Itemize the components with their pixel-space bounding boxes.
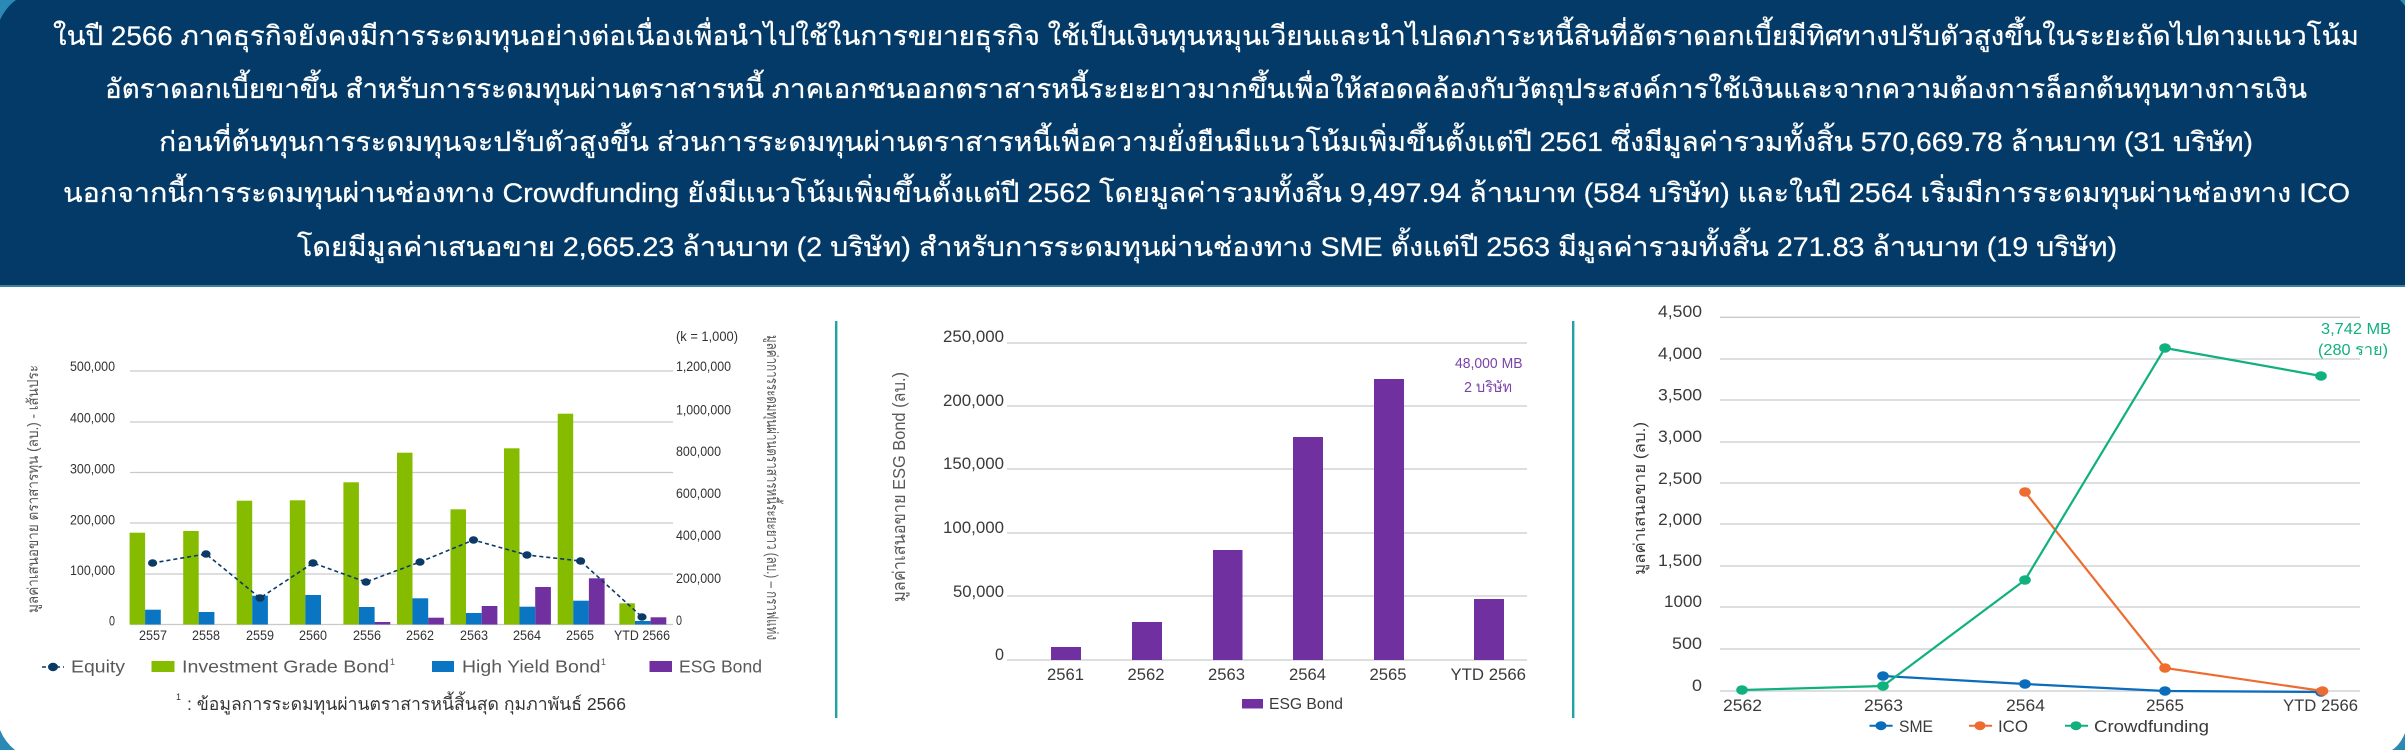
y axis title: มูลค่าเสนอขาย ESG Bond (ลบ.) (889, 372, 910, 602)
category labels: 2564 (513, 627, 541, 643)
left axis labels: 400,000 (70, 410, 115, 426)
right axis labels: 200,000 (676, 570, 721, 586)
category labels: 2563 (1208, 665, 1245, 684)
right axis labels: 600,000 (676, 485, 721, 501)
header panel (0, 0, 2405, 287)
right axis labels: 1,000,000 (676, 402, 731, 418)
ICO line (2019, 487, 2328, 696)
category labels: 2560 (299, 627, 327, 643)
summary text: โดยมีมูลค่าเสนอขาย 2,665.23 ล้านบาท (2 บริษัท) สำหรับการระดมทุนผ่านช่องทาง SME ตั้งแต่ปี 2563 มีมูลค่ารวมทั้งสิ้น 271.83 ล้านบาท (19 บริษัท) (297, 227, 2117, 264)
y axis labels: 3,000 (1658, 427, 1702, 446)
category labels (1047, 665, 1526, 684)
y axis labels: 4,500 (1658, 302, 1702, 321)
legend: 1 (601, 657, 606, 667)
legend: Crowdfunding (2094, 717, 2209, 736)
y axis labels: 500 (1672, 634, 1702, 653)
legend: ESG Bond (679, 656, 762, 676)
y axis labels: 2,000 (1658, 510, 1702, 529)
left axis labels: 0 (109, 613, 115, 629)
category labels (1723, 696, 2358, 715)
y axis title: มูลค่าเสนอขาย (ลบ.) (1632, 422, 1650, 575)
category labels: 2558 (192, 627, 220, 643)
category labels: 2562 (406, 627, 434, 643)
y axis labels: 200,000 (943, 391, 1004, 410)
y axis labels: 2,500 (1658, 469, 1702, 488)
y axis labels: 150,000 (943, 454, 1004, 473)
summary text: อัตราดอกเบี้ยขาขึ้น สำหรับการระดมทุนผ่านตราสารหนี้ ภาคเอกชนออกตราสารหนี้ระยะยาวมากขึ้นเพื่อให้สอดคล้องกับวัตถุประสงค์การใช้เงินและจากความต้องการล็อกต้นทุนทางการเงิน (105, 69, 2307, 106)
y axis labels: 1,500 (1658, 551, 1702, 570)
ESG bars (1051, 379, 1504, 660)
ESG bars (375, 578, 666, 624)
y axis labels: 50,000 (953, 582, 1004, 601)
y axis labels: 3,500 (1658, 386, 1702, 405)
left axis labels (70, 358, 115, 629)
category labels: 2559 (246, 627, 274, 643)
callout: crowdfunding value: (280 ราย) (2318, 342, 2388, 359)
left axis labels: 200,000 (70, 512, 115, 528)
category labels: 2562 (1723, 696, 1762, 715)
divider: left (835, 321, 837, 718)
left axis title: มูลค่าเสนอขาย ตราสารทุน (ลบ.) - เส้นประ (25, 365, 43, 613)
callout: crowdfunding value (2318, 321, 2391, 359)
category labels: 2563 (460, 627, 488, 643)
summary text: นอกจากนี้การระดมทุนผ่านช่องทาง Crowdfunding ยังมีแนวโน้มเพิ่มขึ้นตั้งแต่ปี 2562 โดยมูลค่ารวมทั้งสิ้น 9,497.94 ล้านบาท (584 บริษัท) และในปี 2564 เริ่มมีการระดมทุนผ่านช่องทาง ICO (63, 173, 2350, 210)
legend: ESG Bond (1269, 696, 1343, 713)
legend: 1 (390, 657, 395, 667)
category labels: 2564 (1289, 665, 1326, 684)
category labels: 2563 (1864, 696, 1903, 715)
y axis labels: 250,000 (943, 327, 1004, 346)
category labels: 2561 (1047, 665, 1084, 684)
category labels: YTD 2566 (614, 627, 670, 643)
y axis labels: 1000 (1664, 592, 1702, 611)
legend: High Yield Bond (462, 656, 600, 676)
y axis labels: 0 (995, 645, 1004, 664)
category labels: 2565 (566, 627, 594, 643)
chart: equity and bond issuance (25, 328, 784, 715)
high yield bars (145, 595, 651, 624)
summary text: ในปี 2566 ภาคธุรกิจยังคงมีการระดมทุนอย่างต่อเนื่องเพื่อนำไปใช้ในการขยายธุรกิจ ใช้เป็นเงินทุนหมุนเวียนและนำไปลดภาระหนี้สินที่อัตราดอกเบี้ยมีทิศทางปรับตัวสูงขึ้นในระยะถัดไปตามแนวโน้ม (53, 16, 2359, 53)
crowdfunding line (1736, 343, 2327, 695)
category labels: 2562 (1128, 665, 1164, 684)
y axis labels: 100,000 (943, 518, 1004, 537)
investment grade bars (130, 414, 635, 624)
y axis labels: 4,000 (1658, 344, 1702, 363)
divider: right (1572, 321, 1574, 718)
callout: 48,000 MB (1455, 355, 1522, 396)
right axis labels (676, 328, 738, 628)
category labels: 2556 (353, 627, 381, 643)
right axis labels: 400,000 (676, 527, 721, 543)
right axis labels: 1,200,000 (676, 358, 731, 374)
callout: crowdfunding value: 3,742 MB (2321, 321, 2391, 338)
footnote: : ข้อมูลการระดมทุนผ่านตราสารหนี้สิ้นสุด กุมภาพันธ์ 2566 (187, 691, 626, 715)
category labels: YTD 2566 (1450, 665, 1526, 684)
category labels: YTD 2566 (2283, 696, 2358, 715)
equity dashed line (148, 536, 647, 621)
summary text (53, 16, 2359, 264)
legend (42, 656, 762, 676)
chart: ESG bond issuance (889, 327, 1527, 713)
callout: 48,000 MB: 48,000 MB (1455, 355, 1522, 372)
right axis labels: (k = 1,000) (676, 328, 738, 344)
y axis labels (943, 327, 1004, 664)
left axis labels: 100,000 (70, 562, 115, 578)
legend: Investment Grade Bond (182, 656, 389, 676)
y axis labels (1658, 302, 1702, 695)
y axis labels: 0 (1692, 676, 1702, 695)
callout: 48,000 MB: 2 บริษัท (1464, 379, 1512, 396)
left axis labels: 300,000 (70, 461, 115, 477)
legend: Equity (71, 656, 125, 676)
legend (1870, 717, 2209, 736)
SME line (1877, 671, 2327, 697)
category labels: 2557 (139, 627, 167, 643)
footnote: 1 (176, 692, 181, 702)
right axis title: มูลค่าการระดมทุนผ่านตราสารหนี้ระยะยาว (ลบ.) – กราฟแท่ง (762, 335, 784, 640)
legend: SME (1899, 717, 1933, 736)
chart: SME, ICO and crowdfunding (1632, 302, 2391, 736)
category labels: 2565 (2146, 696, 2184, 715)
legend: ICO (1998, 717, 2028, 736)
right axis labels: 0 (676, 612, 682, 628)
summary text: ก่อนที่ต้นทุนการระดมทุนจะปรับตัวสูงขึ้น ส่วนการระดมทุนผ่านตราสารหนี้เพื่อความยั่งยืนมีแนวโน้มเพิ่มขึ้นตั้งแต่ปี 2561 ซึ่งมีมูลค่ารวมทั้งสิ้น 570,669.78 ล้านบาท (31 บริษัท) (159, 122, 2253, 159)
right axis labels: 800,000 (676, 443, 721, 459)
category labels: 2564 (2006, 696, 2045, 715)
category labels: 2565 (1370, 665, 1406, 684)
left axis labels: 500,000 (70, 358, 115, 374)
category labels (139, 627, 670, 643)
